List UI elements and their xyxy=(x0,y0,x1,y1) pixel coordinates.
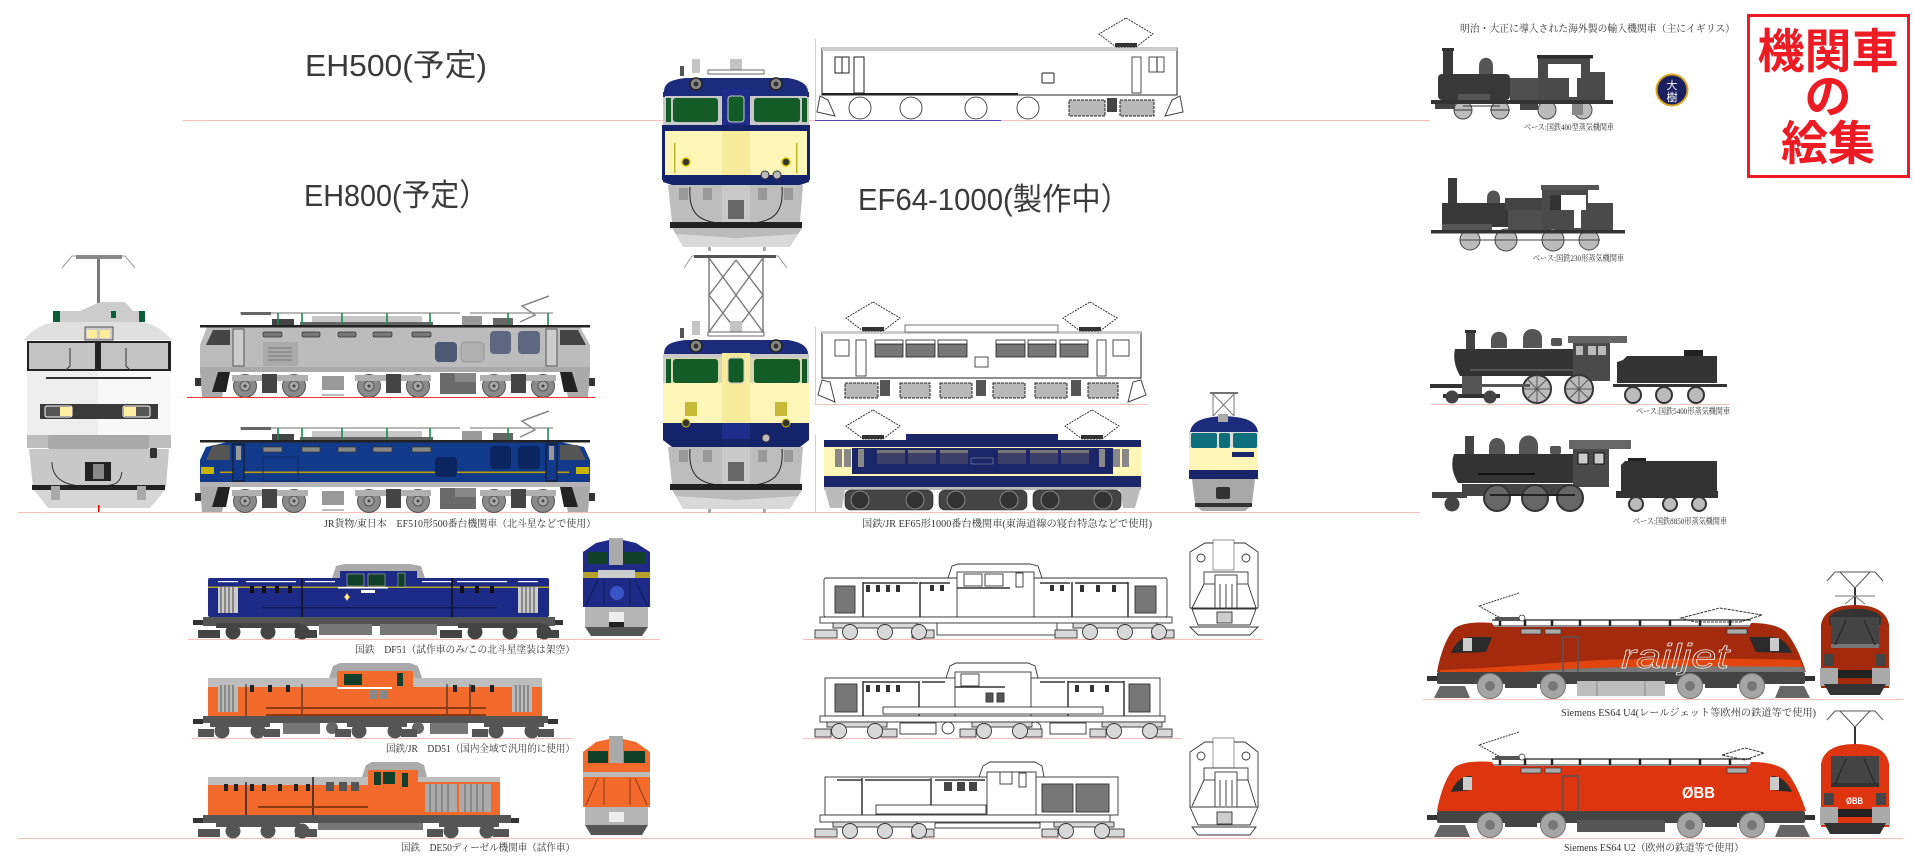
heading: EH800: EH800(予定） xyxy=(304,178,488,213)
EF510 side grey xyxy=(187,296,595,398)
ES64 U2 front: ØBB xyxy=(1846,796,1863,806)
ES64 U2 front xyxy=(1820,711,1890,834)
steam locomotive 8850 xyxy=(1432,436,1718,512)
EF65 side colour view xyxy=(824,410,1141,510)
ES64 U4 railjet side: railjet xyxy=(1621,638,1731,676)
EF65 small front view xyxy=(1189,393,1258,511)
ES64 U2 OBB side xyxy=(1427,732,1815,838)
orange diesel front xyxy=(583,736,650,835)
caption: 400: ベース:国鉄400型蒸気機関車 xyxy=(1524,122,1614,132)
DF51 outline side xyxy=(815,564,1174,640)
steam locomotive 400 xyxy=(1431,48,1613,119)
title box: の xyxy=(1804,70,1852,123)
title box xyxy=(1748,16,1908,176)
title box: 機関車 xyxy=(1758,25,1898,78)
EF510 side blue xyxy=(195,411,595,512)
emblem: 樹 xyxy=(1666,91,1678,104)
EF65 front view with pantograph xyxy=(663,255,809,513)
caption: DD51: 国鉄/JR DD51（国内全域で汎用的に使用） xyxy=(386,742,575,755)
ES64 U4 front xyxy=(1820,572,1890,695)
caption: 5400: ベース:国鉄5400形蒸気機関車 xyxy=(1636,406,1730,416)
caption: DF51: 国鉄 DF51（試作車のみ/この北斗星塗装は架空） xyxy=(355,643,575,656)
emblem xyxy=(1656,74,1688,106)
ES64 U2 OBB side: ØBB xyxy=(1682,785,1715,802)
DD51 outline side xyxy=(815,663,1172,738)
DF51 outline front xyxy=(1190,540,1258,635)
EF64 side outline drawing xyxy=(815,18,1183,120)
DE50 outline side xyxy=(815,762,1124,838)
caption: 230: ベース:国鉄230形蒸気機関車 xyxy=(1533,253,1624,263)
EF65 side outline drawing xyxy=(818,302,1146,402)
DF51 colour front xyxy=(583,538,650,636)
steam locomotive 230 xyxy=(1431,178,1625,251)
caption: imported steam locomotives: 明治・大正に導入された海外製の輸入機関車（主にイギリス） xyxy=(1460,22,1735,35)
DE50 colour side xyxy=(193,762,519,838)
caption: ES64 U2: Siemens ES64 U2（欧州の鉄道等で使用） xyxy=(1564,841,1744,854)
EF64 front view xyxy=(662,59,810,251)
caption: 8850: ベース:国鉄8850形蒸気機関車 xyxy=(1633,516,1727,526)
DD51 colour side xyxy=(193,663,558,738)
caption: DE50: 国鉄 DE50ディーゼル機関車（試作車） xyxy=(401,841,575,854)
EF510 front view xyxy=(24,255,172,512)
caption: ES64 U4: Siemens ES64 U4(レールジェット等欧州の鉄道等で使用) xyxy=(1561,706,1816,719)
heading: EF64-1000: EF64-1000(製作中） xyxy=(858,182,1130,217)
DE50 outline front xyxy=(1190,738,1258,835)
ES64 U4 railjet side xyxy=(1427,593,1815,698)
steam locomotive 5400 xyxy=(1430,329,1727,404)
DF51 colour side xyxy=(193,564,563,640)
caption: EF510: JR貨物/東日本 EF510形500番台機関車（北斗星などで使用） xyxy=(324,517,596,530)
title box: 絵集 xyxy=(1781,117,1875,170)
caption: EF65: 国鉄/JR EF65形1000番台機関車(東海道線の寝台特急などで使用) xyxy=(862,517,1152,530)
emblem: 大 xyxy=(1666,78,1678,92)
heading: EH500: EH500(予定) xyxy=(305,48,487,83)
